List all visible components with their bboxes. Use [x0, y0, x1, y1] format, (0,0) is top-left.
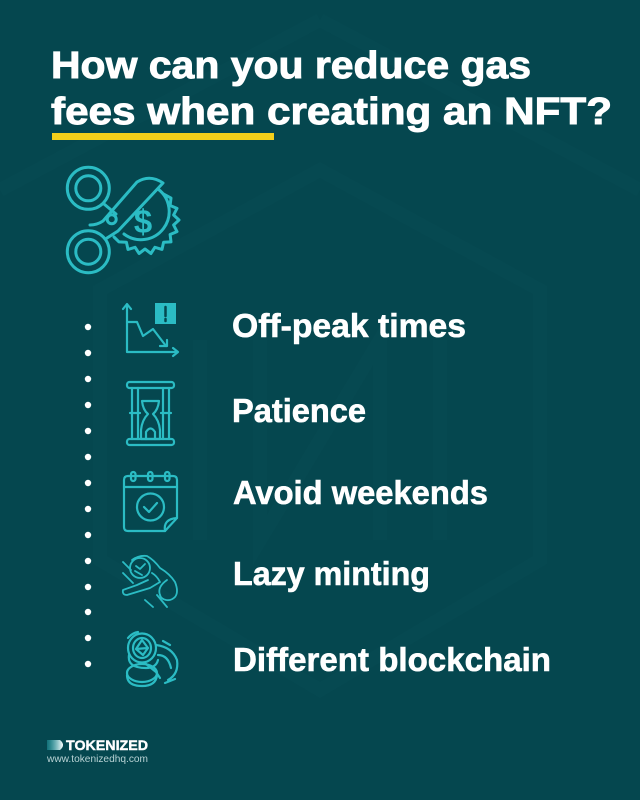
title underline	[52, 133, 274, 140]
label: patience: Patience	[232, 392, 366, 429]
icon: scissors cutting a dollar coin: $	[134, 203, 152, 240]
footer logo: TOKENIZED	[66, 738, 148, 753]
title: How can you reduce gas	[51, 45, 531, 87]
icon: hourglass	[127, 382, 174, 445]
icon: calendar with check	[124, 472, 177, 531]
icon: falling chart with alert	[123, 303, 178, 356]
timeline dots	[85, 324, 91, 667]
icon: scissors cutting a dollar coin	[67, 167, 179, 273]
icon: stacked ethereum coins	[127, 632, 177, 686]
title: fees when creating an NFT?	[51, 91, 612, 133]
label: different blockchain: Different blockchain	[233, 641, 551, 678]
title	[51, 45, 612, 133]
footer url: www.tokenizedhq.com	[46, 753, 148, 765]
icon: sloth on a branch	[123, 556, 177, 607]
label: off-peak times: Off-peak times	[232, 307, 466, 344]
label: lazy minting: Lazy minting	[233, 555, 430, 592]
label: avoid weekends: Avoid weekends	[233, 474, 488, 511]
